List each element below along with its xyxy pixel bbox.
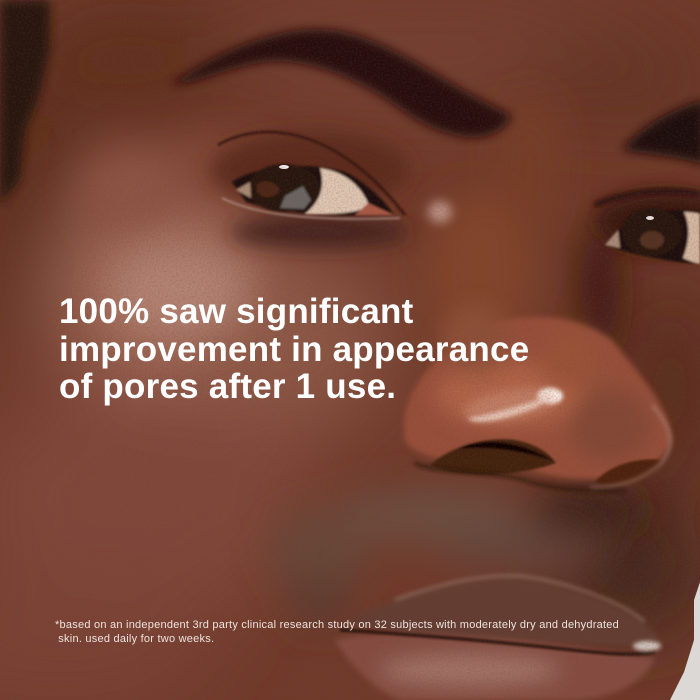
headline: improvement in appearance xyxy=(59,330,529,368)
headline: of pores after 1 use. xyxy=(59,367,396,406)
nose highlights xyxy=(468,388,563,421)
hair at the temple xyxy=(0,0,50,205)
headline: 100% saw significant xyxy=(59,292,414,331)
footnote: skin. used daily for two weeks. xyxy=(58,633,214,645)
eye: right xyxy=(595,190,700,264)
eyebrow: left xyxy=(170,29,512,137)
footnote: *based on an independent 3rd party clinical research study on 32 subjects with moderately dry and dehydrated xyxy=(55,619,619,631)
background sliver at lower right xyxy=(670,582,700,700)
eyebrow: right xyxy=(622,100,700,165)
eye: left xyxy=(210,132,452,248)
headline xyxy=(59,292,529,406)
footnote xyxy=(55,619,619,645)
nose xyxy=(404,305,672,491)
mouth: lips xyxy=(335,576,662,700)
nostrils xyxy=(430,439,662,486)
